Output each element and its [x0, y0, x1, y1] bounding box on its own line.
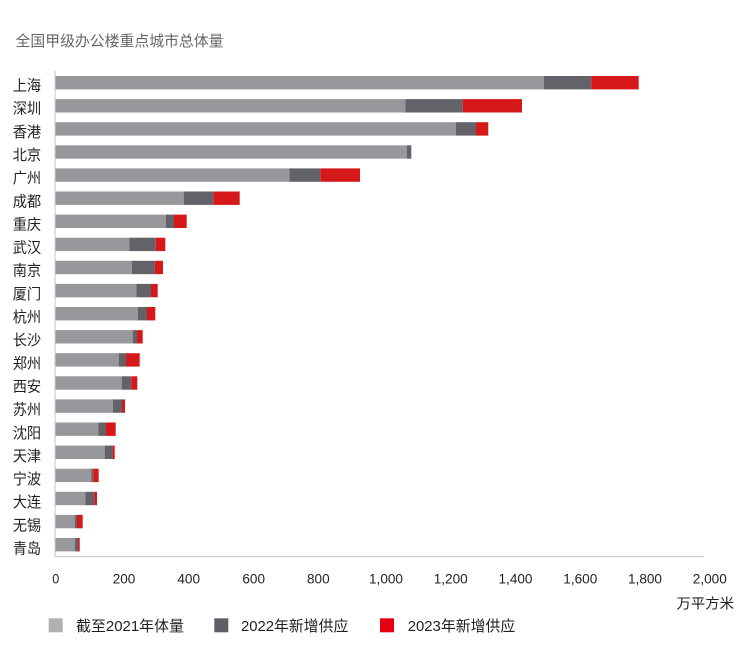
row: 杭州: [13, 307, 155, 326]
row: 长沙: [13, 330, 143, 349]
row: 大连: [13, 492, 97, 511]
x axis tick labels: 2,000: [693, 570, 727, 586]
row: 武汉: 武汉: [13, 240, 42, 257]
title: 全国甲级办公楼重点城市总体量: [16, 32, 224, 50]
row: 宁波: 宁波: [13, 471, 42, 488]
x axis tick labels: 1,400: [498, 570, 533, 586]
row: 无锡: 无锡: [13, 517, 41, 534]
x axis tick labels: 600: [242, 570, 265, 586]
row: 沈阳: [13, 422, 116, 442]
row: 郑州: [13, 353, 140, 372]
row: 上海: 上海: [13, 78, 42, 94]
row: 长沙: 长沙: [13, 332, 42, 349]
row: 上海: [13, 76, 639, 94]
row: 青岛: 青岛: [13, 540, 41, 558]
x axis tick labels: 0: [52, 570, 59, 586]
row: 苏州: [13, 399, 125, 419]
row: 厦门: [13, 284, 158, 303]
row: 西安: 西安: [13, 378, 41, 395]
row: 宁波: [13, 469, 99, 488]
row: 香港: [13, 122, 488, 141]
axis unit label: 万平方米: [676, 596, 734, 612]
x axis tick labels: 1,800: [628, 570, 662, 586]
row: 深圳: [13, 99, 522, 118]
row: 重庆: 重庆: [13, 216, 42, 233]
row: 广州: 广州: [13, 170, 41, 187]
row: 深圳: 深圳: [13, 101, 41, 118]
row: 厦门: 厦门: [13, 286, 41, 303]
row: 广州: [13, 168, 360, 187]
row: 杭州: 杭州: [13, 309, 41, 326]
chart: stacked bars by city: [13, 71, 703, 558]
legend item: 2022: 2022年新增供应: [241, 617, 348, 635]
row: 重庆: [13, 215, 187, 233]
x axis tick labels: 1,600: [563, 570, 597, 586]
row: 西安: [13, 376, 137, 395]
row: 无锡: [13, 515, 83, 534]
row: 南京: 南京: [13, 263, 41, 280]
row: 天津: [13, 446, 115, 465]
legend item: 2023: 2023年新增供应: [408, 617, 515, 635]
row: 武汉: [13, 238, 165, 257]
x axis tick labels: 200: [113, 570, 136, 586]
row: 沈阳: 沈阳: [13, 425, 41, 442]
x axis tick labels: 800: [307, 570, 330, 586]
row: 成都: 成都: [13, 193, 42, 210]
legend item: up to 2021: 截至2021年体量: [76, 618, 184, 635]
x axis tick labels: [52, 570, 727, 586]
x axis tick labels: 1,200: [434, 570, 468, 586]
x axis line: [54, 556, 704, 557]
row: 北京: 北京: [13, 147, 41, 164]
x axis tick labels: 400: [177, 570, 200, 586]
row: 北京: [13, 145, 411, 164]
row: 香港: 香港: [13, 124, 42, 141]
row: 郑州: 郑州: [13, 355, 41, 372]
row: 南京: [13, 261, 163, 280]
x axis tick labels: 1,000: [369, 570, 403, 586]
row: 大连: 大连: [13, 494, 42, 511]
row: 天津: 天津: [13, 448, 41, 465]
y axis line: [54, 71, 56, 557]
row: 成都: [13, 192, 240, 210]
row: 苏州: 苏州: [13, 402, 41, 419]
legend: [49, 617, 515, 635]
row: 青岛: [13, 538, 80, 558]
